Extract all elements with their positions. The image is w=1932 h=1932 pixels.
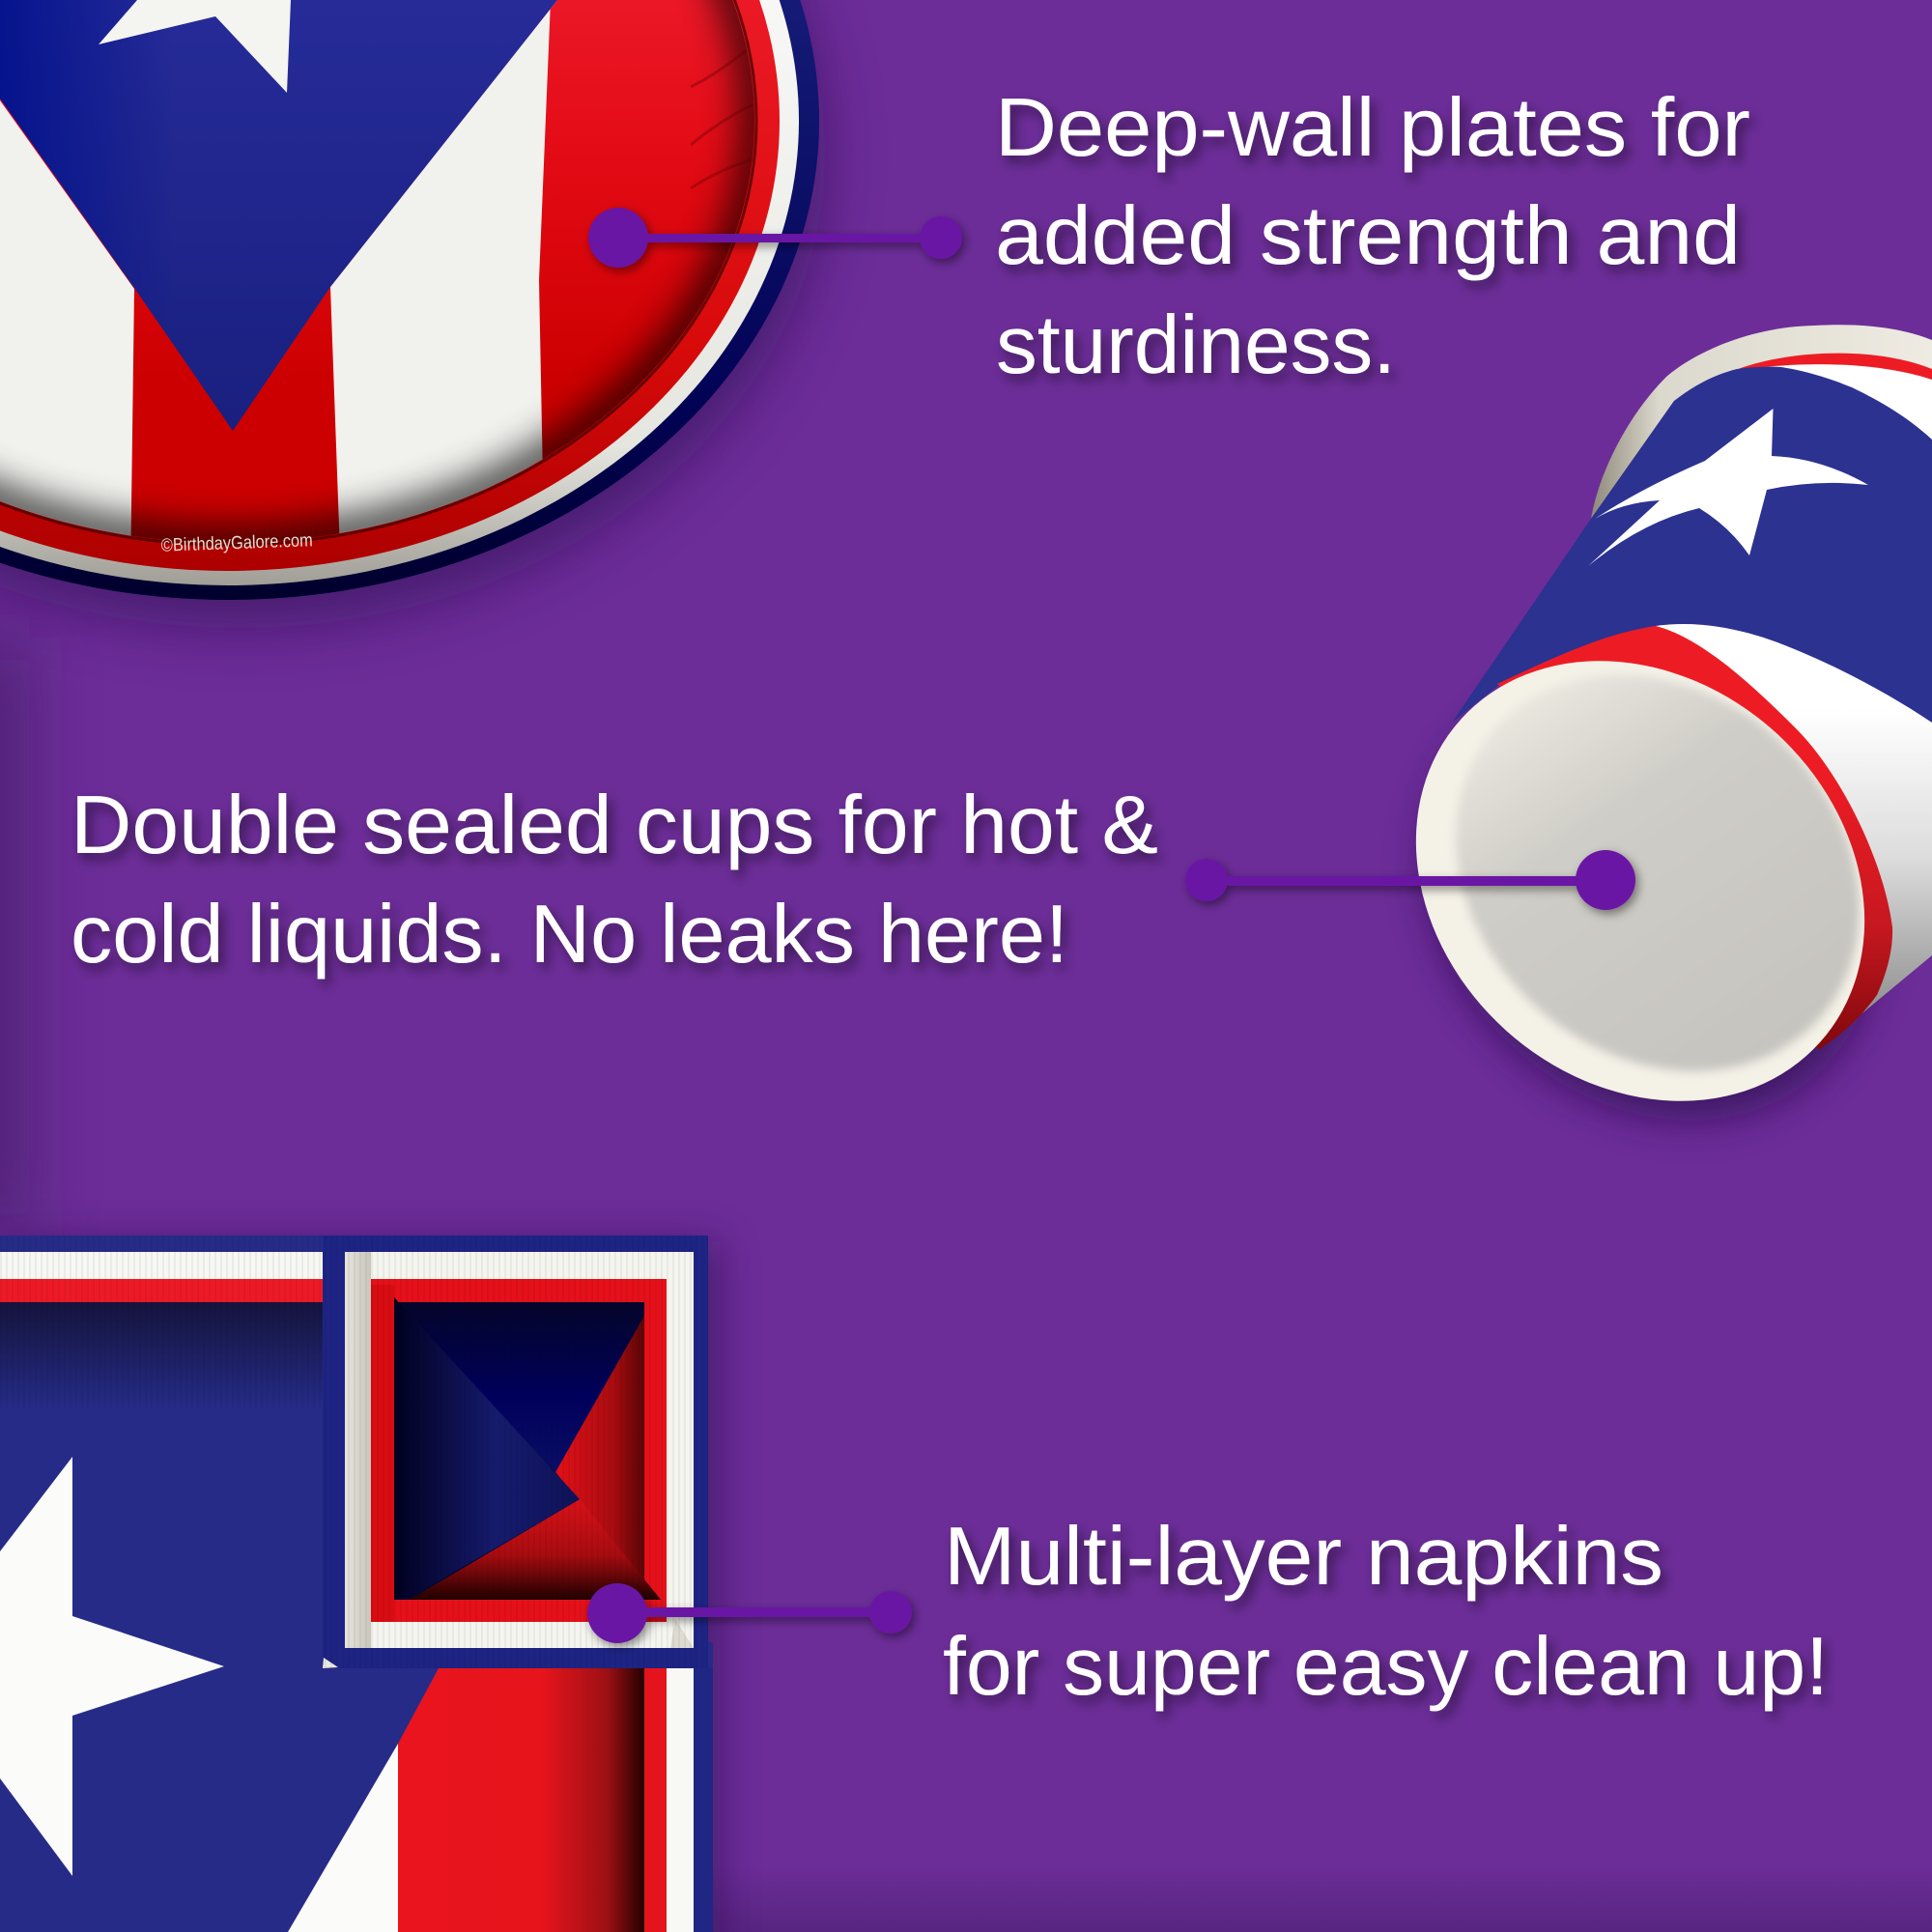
cup white lower band	[1656, 624, 1932, 1050]
plate wrinkles	[691, 48, 753, 188]
well inner shadow	[0, 0, 759, 546]
napkin red stripe	[398, 1668, 644, 1932]
callout text: plates: Deep-wall plates for	[995, 82, 1750, 174]
cup rim	[1591, 325, 1932, 519]
plate outer rim	[0, 0, 819, 600]
callout text: cups: cold liquids. No leaks here!	[71, 889, 1068, 980]
callout text: plates: sturdiness.	[996, 299, 1396, 391]
napkin folded corner	[323, 1236, 708, 1668]
flag blue triangle	[0, 0, 557, 431]
cup blue section	[1452, 367, 1932, 723]
plate copyright: ©BirthdayGalore.com	[160, 530, 313, 556]
callout text: plates	[995, 82, 1750, 391]
callout pointer: plates	[588, 208, 962, 268]
callout text: cups	[71, 780, 1158, 980]
callout pointer: cups	[1185, 850, 1635, 910]
cup base	[1416, 661, 1864, 1101]
plate flag well	[0, 0, 773, 580]
napkin white stripe	[288, 1744, 398, 1932]
callout text: napkins	[943, 1511, 1829, 1713]
cup red thin band	[1733, 354, 1932, 380]
cup	[1407, 325, 1932, 1138]
flag white stripes	[0, 100, 134, 535]
cup shadow	[1336, 589, 1932, 1211]
flag star	[99, 0, 291, 93]
cup star	[1588, 409, 1868, 566]
plate	[0, 0, 825, 628]
napkin star	[0, 1457, 224, 1876]
callout text: cups: Double sealed cups for hot &	[71, 780, 1158, 871]
napkin body	[0, 1236, 713, 1932]
napkin shadow	[0, 1241, 720, 1932]
callout text: plates: added strength and	[995, 190, 1741, 282]
callout text: napkins: Multi-layer napkins	[944, 1511, 1663, 1603]
callout pointer: napkins	[587, 1583, 912, 1643]
napkin border stripes	[644, 1668, 713, 1932]
cup red band	[1497, 626, 1892, 1050]
cup body white upper band	[1719, 364, 1932, 464]
napkin	[0, 1236, 720, 1932]
callout text: napkins: for super easy clean up!	[943, 1621, 1829, 1713]
napkin inner square	[394, 1297, 661, 1600]
plate shadow	[0, 0, 825, 628]
